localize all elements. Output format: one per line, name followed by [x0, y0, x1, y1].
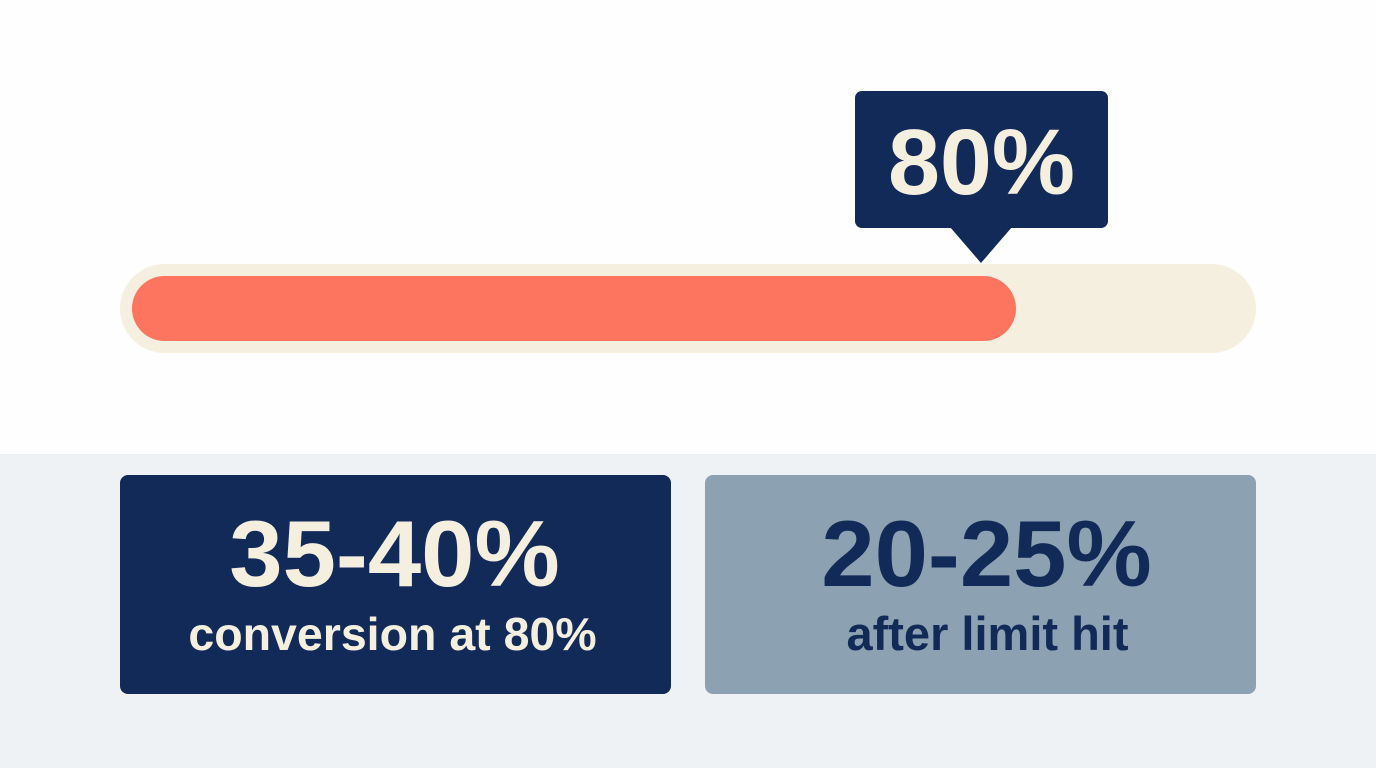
- stat value: 20-25%: [821, 501, 1152, 606]
- callout: 80%: [855, 91, 1108, 228]
- callout value: 80%: [888, 110, 1075, 214]
- stat value: 35-40%: [229, 501, 560, 606]
- stat card: after limit hit: [705, 475, 1256, 694]
- stat card: conversion at 80%: [120, 475, 671, 694]
- bottom band: [0, 454, 1376, 768]
- progress bar track: [120, 264, 1256, 353]
- stat label: conversion at 80%: [188, 608, 597, 660]
- progress bar fill 80%: [132, 276, 1016, 341]
- callout pointer: [950, 228, 1012, 263]
- stat label: after limit hit: [846, 607, 1129, 660]
